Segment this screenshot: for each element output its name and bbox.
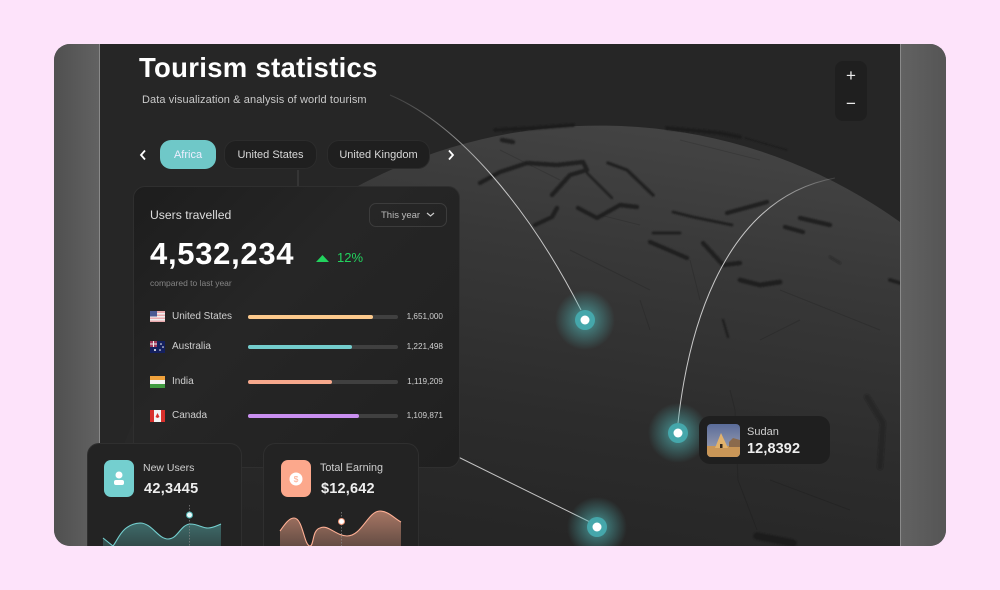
flag: Australia bbox=[150, 341, 165, 353]
callout: Sudan bbox=[699, 416, 830, 464]
dropdown: this year bbox=[369, 203, 447, 227]
dashboard card bbox=[54, 44, 946, 546]
label: New Users bbox=[143, 462, 194, 474]
right chevron bbox=[448, 150, 454, 160]
row: Australia: 1,221,498 bbox=[407, 342, 443, 351]
comparison note: compared to last year bbox=[150, 278, 232, 288]
row: United States bbox=[150, 311, 443, 322]
tab: United Kingdom: United Kingdom bbox=[339, 149, 418, 161]
value: 42,3445 bbox=[144, 481, 199, 497]
value: $12,642 bbox=[321, 481, 375, 497]
plus: + bbox=[846, 66, 856, 85]
land relief bbox=[480, 125, 900, 543]
change: 12 percent: 12% bbox=[337, 250, 363, 265]
row: United States: 1,651,000 bbox=[407, 312, 443, 321]
subtitle: Data visualization & analysis of world tourism bbox=[142, 94, 367, 106]
arcs bbox=[298, 95, 835, 522]
row: Canada: 1,109,871 bbox=[407, 411, 443, 420]
tab: Africa: Africa bbox=[174, 149, 202, 161]
dropdown: this year: This year bbox=[381, 210, 420, 221]
row: Australia bbox=[150, 341, 443, 353]
flag: US bbox=[150, 311, 165, 322]
tab: United States bbox=[224, 140, 317, 169]
icon: coin: $ bbox=[294, 474, 299, 484]
value: 12,8392 bbox=[747, 441, 800, 457]
panel: new users bbox=[87, 443, 242, 546]
panel: users travelled bbox=[133, 186, 460, 468]
row: India bbox=[150, 376, 443, 388]
globe bbox=[298, 94, 900, 546]
label: Total Earning bbox=[320, 462, 383, 474]
marker: Sudan bbox=[648, 403, 708, 463]
label: Sudan bbox=[747, 426, 779, 438]
zoom control bbox=[835, 61, 867, 121]
tab: United States: United States bbox=[237, 149, 304, 161]
flag: India bbox=[150, 376, 165, 388]
marker: south bbox=[567, 497, 627, 557]
row: Canada bbox=[150, 410, 443, 422]
row: Canada: Canada bbox=[172, 410, 207, 421]
title: Tourism statistics bbox=[139, 52, 378, 83]
row: United States: United States bbox=[172, 311, 232, 322]
row: India: 1,119,209 bbox=[407, 377, 443, 386]
area chart bbox=[280, 510, 402, 546]
marker: central bbox=[555, 290, 615, 350]
icon: user bbox=[104, 460, 134, 497]
tab: Africa bbox=[160, 140, 216, 169]
right strip bbox=[901, 44, 946, 546]
flag: Canada bbox=[150, 410, 165, 422]
row: Australia: Australia bbox=[172, 341, 211, 352]
area chart bbox=[102, 505, 222, 546]
left strip bbox=[54, 44, 100, 546]
minus: − bbox=[846, 94, 856, 113]
left chevron bbox=[140, 150, 146, 160]
change: 12 percent bbox=[316, 250, 363, 265]
panel: total earning bbox=[263, 443, 419, 546]
tabs row bbox=[140, 140, 454, 169]
heading: users travelled: Users travelled bbox=[150, 208, 231, 222]
icon: coin bbox=[281, 460, 311, 497]
total users: 4,532,234 bbox=[150, 236, 294, 271]
tab: United Kingdom bbox=[327, 140, 430, 169]
faint terrain lines bbox=[500, 140, 880, 530]
row: India: India bbox=[172, 376, 194, 387]
map background bbox=[99, 44, 901, 546]
photo: pyramid bbox=[707, 424, 740, 457]
